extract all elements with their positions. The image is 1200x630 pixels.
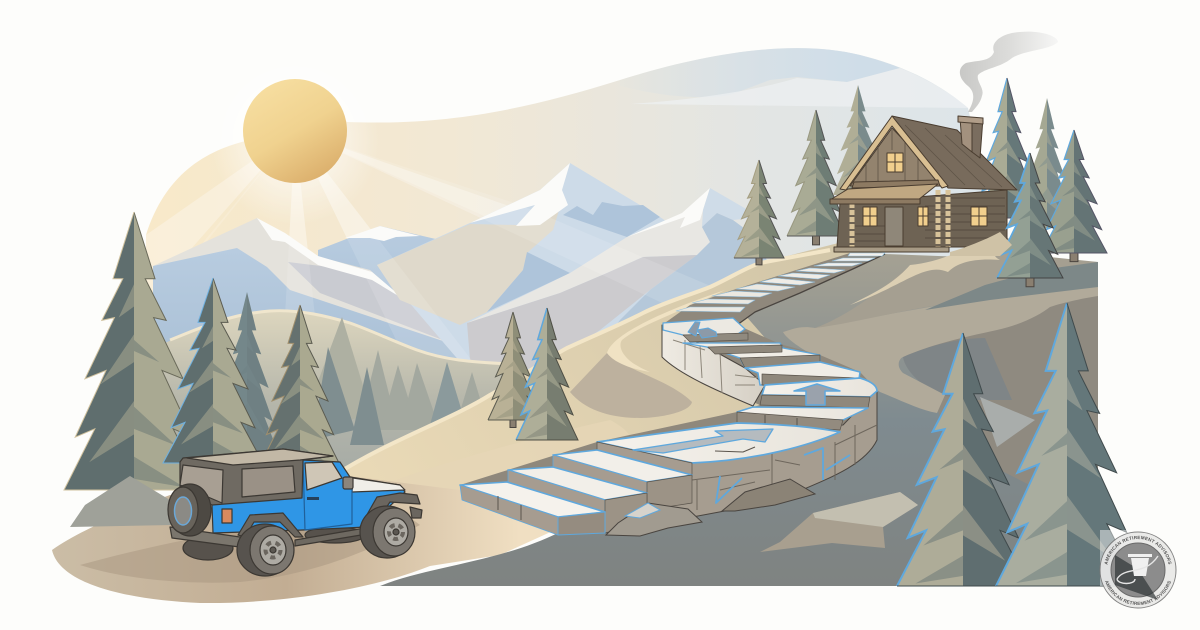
- center mountains: [377, 163, 770, 370]
- upper rail line: [737, 254, 885, 325]
- side step: [295, 528, 367, 546]
- foreground rock right: [760, 492, 918, 552]
- stair tread 9: [663, 318, 748, 342]
- tree: back left dark: [216, 292, 278, 452]
- cabin roof: [892, 116, 1017, 190]
- sand hill: [335, 240, 900, 540]
- hill shadow mound: [570, 353, 692, 418]
- left road: [52, 475, 555, 603]
- far mountain peak: [318, 226, 520, 370]
- pale rock face: [980, 397, 1035, 447]
- second peak lower shade: [467, 255, 697, 370]
- main peak left flank: [377, 207, 560, 325]
- mirror: [343, 477, 353, 489]
- second peak band: [467, 188, 710, 323]
- front bumper: [410, 507, 422, 518]
- tree: cabin right front: [997, 153, 1063, 287]
- tree: cabin far left: [734, 160, 784, 265]
- porch roof: [830, 184, 938, 200]
- left mountain: [153, 218, 510, 400]
- rear bumper: [170, 527, 247, 548]
- stair wall: upper curved retaining wall: [662, 325, 765, 406]
- sky panel: [146, 48, 1000, 420]
- light shafts over mountains: [286, 238, 708, 358]
- taillight: [222, 509, 232, 523]
- watermark square: [1100, 530, 1132, 586]
- roadside rock: [70, 476, 172, 527]
- gable: [850, 128, 948, 186]
- mid hill: [160, 311, 510, 470]
- sand path: [783, 287, 1098, 413]
- stair base fill: [460, 253, 885, 535]
- hood highlight: [352, 478, 405, 492]
- smoke: [960, 32, 1058, 112]
- roof top: [187, 449, 333, 465]
- stair tread 7: [745, 362, 860, 387]
- seal lettering: AMERICAN RETIREMENT ADVISORS: [1105, 580, 1171, 605]
- tree: foreground right: [996, 303, 1138, 586]
- log walls: [837, 190, 1007, 247]
- door handle: [307, 497, 319, 500]
- stair tread 5: [737, 407, 868, 430]
- gable trim: [840, 116, 948, 190]
- gable window: [887, 153, 903, 172]
- spare wheel: [168, 484, 211, 536]
- tree: hill back: [488, 312, 538, 428]
- rock: near stairs left: [606, 503, 702, 536]
- front wheel: [360, 506, 415, 558]
- center window: [918, 207, 928, 226]
- right ground: [380, 232, 1098, 586]
- brown hillside right: [900, 290, 1098, 520]
- main peak snow: [470, 163, 570, 226]
- tree: left middle: [163, 278, 263, 463]
- stair step 3: [553, 450, 692, 510]
- front fender: [360, 493, 420, 527]
- tree: behind cabin: [833, 85, 883, 195]
- tree: foreground left: [897, 333, 1029, 586]
- tree: cabin left: [787, 110, 845, 245]
- icon: up arrow on tread: [794, 384, 840, 405]
- tree: hill front: [516, 308, 578, 440]
- seal: American Retirement Advisors: [1100, 532, 1176, 608]
- stair tread 8: [683, 343, 820, 368]
- second peak snow: [627, 188, 710, 237]
- seal column: [1128, 554, 1152, 576]
- hump highlight: [850, 232, 1000, 305]
- stair step 2: [508, 467, 647, 533]
- gable ledge: [852, 180, 940, 188]
- tree: right back second: [1022, 98, 1072, 228]
- blue body: [212, 460, 405, 533]
- hardtop: [180, 449, 333, 505]
- right window: [971, 207, 987, 226]
- deck: [834, 247, 949, 252]
- seal lettering: [1104, 536, 1172, 605]
- cabin: [830, 116, 1017, 252]
- stair landing with arrow: [597, 423, 840, 477]
- rock: near stairs right: [722, 479, 815, 511]
- rear wheel: [237, 524, 294, 576]
- left window: [863, 207, 877, 226]
- side window: [242, 466, 295, 497]
- hump overlap in front of cabin: [950, 232, 1012, 256]
- stair step 1: [460, 482, 605, 535]
- main peak body: [377, 163, 760, 370]
- seal swoosh: [1117, 556, 1158, 584]
- hump: [815, 232, 1098, 328]
- stair tread 6 with arrow: [760, 378, 877, 408]
- seal lettering: AMERICAN RETIREMENT ADVISORS: [1104, 536, 1172, 565]
- jeep: [168, 449, 422, 576]
- porch beam: [830, 199, 920, 204]
- tree: left front: [260, 305, 340, 465]
- main peak blue shadow: [563, 202, 660, 237]
- sun rays: [146, 151, 506, 292]
- second peak cap: [702, 188, 760, 227]
- chimney: [958, 116, 983, 158]
- rear window: [180, 465, 223, 503]
- upper flight treads: [676, 253, 885, 312]
- door line: [303, 460, 352, 530]
- sun: [210, 55, 380, 225]
- far wheels: [183, 527, 365, 560]
- distant tree line: [300, 317, 488, 445]
- stair wall: lower curved retaining wall: [605, 390, 877, 533]
- tree: large left: [64, 212, 204, 490]
- curved stone stairway: [460, 253, 885, 535]
- tree: right of cabin: [1041, 130, 1107, 262]
- rear fender: [238, 513, 303, 537]
- tree: right back: [977, 78, 1037, 218]
- door window: [305, 462, 342, 490]
- door: [885, 207, 903, 246]
- slate hollow: [903, 338, 1012, 400]
- hump shadow teal: [925, 262, 1098, 310]
